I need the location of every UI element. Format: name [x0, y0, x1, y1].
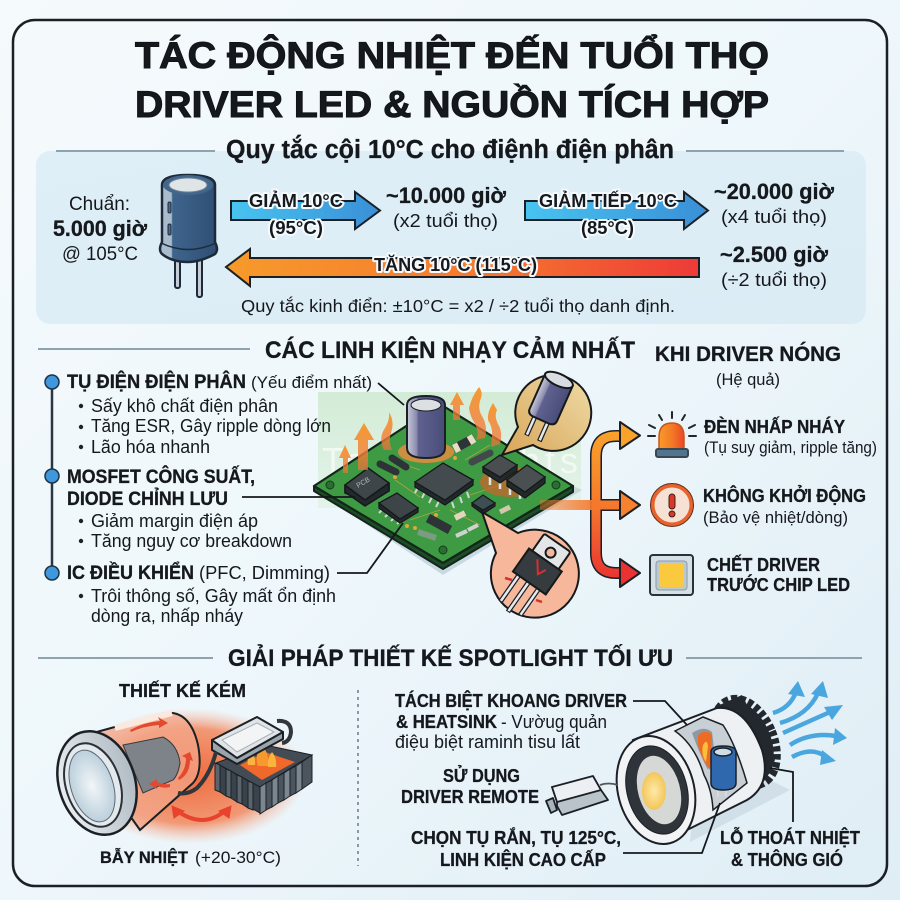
consequence: flicker: ĐÈN NHẤP NHÁY	[704, 416, 845, 437]
component list: MOSFET CÔNG SUẤT,	[67, 466, 255, 488]
component list: dòng ra, nhấp nháy	[91, 606, 243, 626]
leader lines: solutions	[623, 701, 793, 853]
consequence: driver death: CHẾT DRIVER	[707, 554, 820, 575]
icon: warning circle	[650, 484, 694, 526]
driver box	[212, 717, 283, 764]
result: 20.000 giờ: ~20.000 giờ	[714, 179, 834, 204]
heat circulation arrow	[176, 810, 226, 820]
consequence: flicker: (Tụ suy giảm, ripple tăng)	[704, 439, 877, 457]
lamp front	[605, 727, 707, 853]
branching arrows	[540, 422, 640, 587]
solution texts: CHỌN TỤ RẮN, TỤ 125°C,	[411, 827, 621, 848]
component: QFP controller	[415, 463, 473, 508]
consequence: no start	[703, 485, 866, 527]
solution texts: - Vườug quản	[501, 712, 607, 732]
component list	[45, 371, 372, 626]
cutaway with capacitor and flame	[675, 717, 747, 810]
result: 20.000 giờ	[714, 179, 834, 227]
component list: Lão hóa nhanh	[91, 437, 210, 457]
heading: consequences	[655, 342, 841, 389]
consequence: no start: (Bảo vệ nhiệt/dòng)	[703, 509, 848, 527]
solution texts: & HEATSINK	[396, 712, 497, 732]
component: SOIC chip	[379, 493, 418, 524]
component list: Trôi thông số, Gây mất ổn định	[91, 586, 336, 606]
large capacitor	[398, 396, 454, 463]
component list: TỤ ĐIỆN ĐIỆN PHÂN	[67, 371, 246, 393]
heading: poor design: THIẾT KẾ KÉM	[119, 680, 246, 701]
result: 2.500 giờ: ~2.500 giờ	[720, 242, 828, 267]
heatsink fins	[705, 693, 785, 797]
icon: LED chip	[650, 555, 693, 595]
solution texts: điệu biệt raminh tisu lất	[395, 732, 580, 752]
magnifier: capacitor	[502, 368, 591, 455]
result: 20.000 giờ: (x4 tuổi thọ)	[721, 206, 827, 227]
arrow: giảm 10°C	[231, 190, 380, 238]
component list: IC ĐIỀU KHIỂN	[67, 562, 194, 584]
baseline rating: Chuẩn:	[69, 194, 130, 215]
arrow: tăng 10°C: TĂNG 10°C (115°C)	[374, 254, 537, 275]
solution texts: LINH KIỆN CAO CẤP	[440, 849, 606, 870]
caption: heat trap: (+20-30°C)	[195, 848, 281, 867]
watermark: TechInsights	[322, 440, 578, 481]
solution texts: LỖ THOÁT NHIỆT	[720, 827, 860, 848]
component list: Tăng nguy cơ breakdown	[91, 531, 292, 551]
lamp body	[633, 708, 765, 840]
illustration: good design spotlight	[546, 681, 847, 853]
title	[135, 33, 769, 125]
rule note: Quy tắc kinh điển: ±10°C = x2 / ÷2 tuổi thọ danh định.	[241, 295, 675, 316]
heat flames and arrows	[339, 387, 501, 473]
title: DRIVER LED & NGUỒN TÍCH HỢP	[135, 83, 769, 125]
result: 2.500 giờ	[720, 242, 828, 290]
solution texts: & THÔNG GIÓ	[731, 849, 843, 870]
component: MOSFETs	[480, 455, 545, 499]
panel: 10°C rule	[36, 134, 866, 324]
caption: heat trap	[100, 848, 281, 867]
remote driver	[546, 776, 618, 815]
caption: heat trap: BẪY NHIỆT	[100, 848, 189, 867]
solution texts: TÁCH BIỆT KHOANG DRIVER	[395, 690, 627, 711]
arrow: giảm tiếp 10°C: (85°C)	[581, 217, 634, 238]
wires	[178, 721, 291, 793]
PCB illustration	[314, 387, 582, 575]
component: diodes and SMD parts	[380, 438, 510, 538]
heading: consequences: (Hệ quả)	[716, 370, 780, 389]
heading: sensitive components: CÁC LINH KIỆN NHẠY CẢM NHẤT	[265, 335, 635, 364]
component: small chip	[472, 495, 495, 514]
component list: (PFC, Dimming)	[199, 563, 330, 583]
component list: Sấy khô chất điện phân	[91, 396, 278, 416]
title: TÁC ĐỘNG NHIỆT ĐẾN TUỔI THỌ	[135, 33, 769, 76]
component list: Tăng ESR, Gây ripple dòng lớn	[91, 416, 331, 436]
icon: siren	[648, 412, 696, 457]
consequence: driver death	[707, 554, 850, 595]
arrow: tăng 10°C	[226, 249, 699, 286]
component list: (Yếu điểm nhất)	[251, 373, 372, 392]
airflow arrows	[773, 692, 836, 757]
solution texts	[395, 690, 860, 870]
baseline rating: @ 105°C	[62, 244, 138, 265]
result: 10.000 giờ: (x2 tuổi thọ)	[393, 210, 498, 231]
result: 2.500 giờ: (÷2 tuổi thọ)	[721, 269, 827, 290]
icon: capacitor	[160, 175, 217, 297]
result: 10.000 giờ: ~10.000 giờ	[386, 183, 506, 208]
consequence: driver death: TRƯỚC CHIP LED	[707, 574, 850, 595]
solution texts: SỬ DỤNG	[443, 765, 520, 786]
consequence: flicker	[704, 416, 877, 457]
consequence: no start: KHÔNG KHỞI ĐỘNG	[703, 485, 866, 506]
result: 10.000 giờ	[386, 183, 506, 231]
solution texts: DRIVER REMOTE	[401, 787, 539, 807]
component: PCB chip	[345, 468, 389, 506]
watermark	[318, 392, 581, 508]
leader lines	[242, 383, 404, 573]
baseline rating: 5.000 giờ	[53, 216, 147, 241]
arrow: giảm 10°C: (95°C)	[269, 217, 323, 238]
arrow: giảm 10°C: GIẢM 10°C	[249, 190, 343, 211]
component: PCB chip: PCB	[356, 476, 372, 490]
arrow: giảm tiếp 10°C	[525, 190, 708, 238]
heatsink	[215, 745, 312, 814]
illustration: poor design lamp	[44, 708, 312, 845]
magnifier: failed MOSFET	[482, 512, 579, 624]
arrow: giảm tiếp 10°C: GIẢM TIẾP 10°C	[539, 190, 677, 211]
heading: design solutions: GIẢI PHÁP THIẾT KẾ SPOTLIGHT TỐI ƯU	[228, 643, 673, 672]
component list: DIODE CHỈNH LƯU	[67, 488, 228, 510]
heading: consequences: KHI DRIVER NÓNG	[655, 342, 841, 366]
heading: 10°C rule: Quy tắc cội 10°C cho điệnh điện phân	[226, 134, 674, 164]
baseline rating	[53, 194, 147, 265]
component list: Giảm margin điện áp	[91, 511, 258, 531]
